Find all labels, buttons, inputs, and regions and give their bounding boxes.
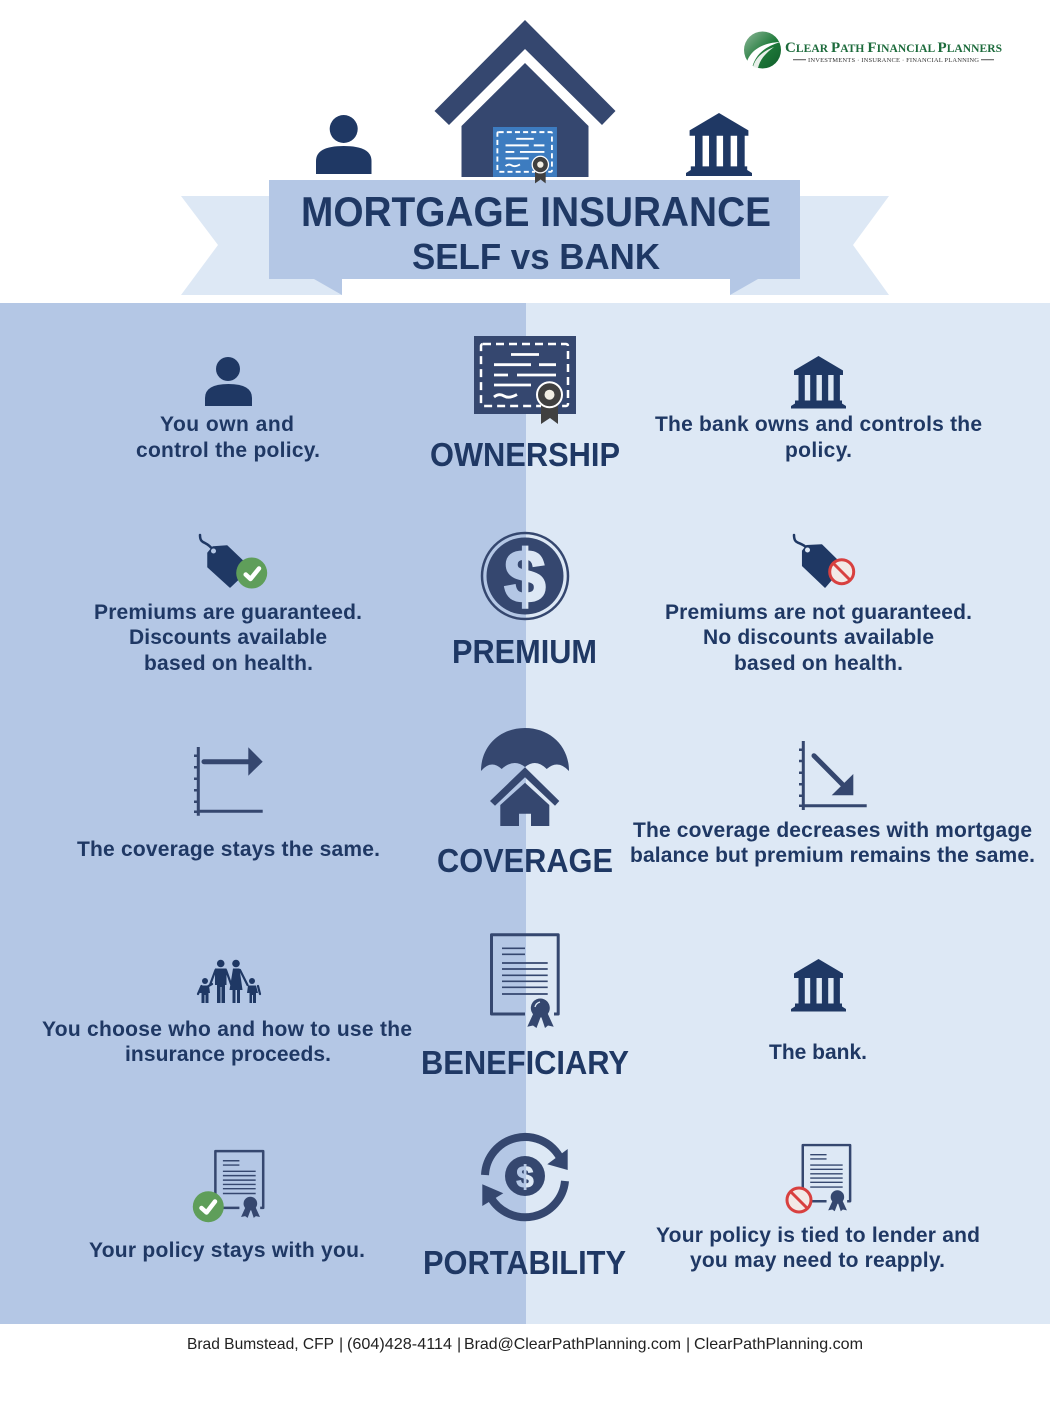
text: policy tied: you may need to reapply.	[690, 1249, 945, 1272]
icon: dollar coin	[482, 533, 568, 619]
text: you choose: You choose who and how to use the	[42, 1018, 412, 1041]
footer contact line: |	[686, 1336, 690, 1353]
row: premium, bank side	[665, 535, 972, 675]
row: premium, self side	[94, 535, 362, 675]
icon: policy document	[492, 935, 558, 1028]
footer contact line: |	[339, 1336, 343, 1353]
text: premiums guaranteed	[94, 601, 362, 675]
text: bank owns: The bank owns and controls the	[655, 413, 982, 436]
text: coverage decreases: The coverage decreases with mortgage	[633, 819, 1032, 842]
text: coverage same: The coverage stays the same.	[77, 838, 380, 861]
heading: premium: PREMIUM	[452, 633, 597, 670]
icon: bank	[791, 959, 846, 1012]
icon: bank	[791, 356, 846, 408]
text: coverage decreases	[630, 819, 1035, 867]
row: ownership, bank side	[655, 356, 982, 462]
text: premiums not guaranteed	[665, 601, 972, 675]
icon: circular arrows with dollar	[482, 1137, 568, 1217]
icon: person	[205, 357, 252, 406]
heading: beneficiary: BENEFICIARY	[421, 1044, 629, 1081]
text: premiums guaranteed: based on health.	[144, 652, 313, 675]
panel: bank (right column background)	[526, 303, 1050, 1324]
text: policy tied	[656, 1224, 980, 1272]
row: beneficiary, center heading and icon	[421, 935, 629, 1081]
row: ownership, center heading and icon	[430, 336, 620, 473]
icon: family	[198, 960, 260, 1003]
text: the bank: The bank.	[769, 1041, 867, 1064]
icon: policy document with check	[193, 1151, 263, 1222]
text: policy tied: Your policy is tied to lender and	[656, 1224, 980, 1247]
icon: bank (header)	[686, 113, 752, 176]
icon: policy document with prohibition	[787, 1145, 850, 1212]
text: policy stays: Your policy stays with you.	[89, 1239, 365, 1262]
text: you choose: insurance proceeds.	[125, 1043, 331, 1066]
text: bank owns	[655, 413, 982, 462]
text: premiums guaranteed: Premiums are guaranteed.	[94, 601, 362, 624]
text: premiums not guaranteed: No discounts available	[703, 626, 934, 649]
row: portability, self side	[89, 1151, 365, 1262]
footer contact line: Brad@ClearPathPlanning.com	[464, 1336, 681, 1353]
row: portability, center heading and icon	[423, 1137, 626, 1281]
icon: price tag with prohibition	[794, 535, 854, 587]
text: you own: control the policy.	[136, 439, 320, 462]
text: coverage decreases: balance but premium remains the same.	[630, 844, 1035, 867]
footer contact line: |	[457, 1336, 461, 1353]
icon: dollar coin: $	[504, 535, 546, 618]
footer contact line: ClearPathPlanning.com	[694, 1336, 863, 1353]
row: portability, bank side	[656, 1145, 980, 1272]
text: you choose	[42, 1018, 412, 1066]
logo: Clear Path Financial Planners: CLEAR PATH FINANCIAL PLANNERS	[785, 40, 1002, 56]
icon: umbrella over house	[481, 728, 569, 826]
row: coverage, self side	[77, 747, 380, 861]
footer contact line	[187, 1336, 863, 1353]
icon: circular arrows with dollar: $	[516, 1159, 534, 1194]
text: premiums not guaranteed: based on health.	[734, 652, 903, 675]
row: coverage, bank side	[630, 741, 1035, 867]
title ribbon	[181, 180, 889, 295]
icon: price tag with check	[200, 535, 267, 588]
text: premiums not guaranteed: Premiums are not guaranteed.	[665, 601, 972, 624]
row: ownership, self side	[136, 357, 320, 462]
panel: self (left column background)	[0, 303, 526, 1324]
footer contact line: (604)428-4114	[347, 1336, 452, 1353]
title: SELF vs BANK	[412, 236, 660, 277]
logo: Clear Path Financial Planners	[744, 32, 1002, 68]
text: you own: You own and	[160, 413, 294, 436]
text: premiums guaranteed: Discounts available	[129, 626, 327, 649]
icon: house with certificate (header)	[434, 20, 616, 183]
title	[301, 188, 771, 277]
chart: decreasing coverage	[799, 741, 867, 810]
chart: flat coverage	[194, 747, 263, 816]
heading: portability: PORTABILITY	[423, 1244, 626, 1281]
footer contact line: Brad Bumstead, CFP	[187, 1336, 334, 1353]
text: bank owns: policy.	[785, 439, 852, 462]
row: coverage, center heading and icon	[437, 728, 613, 879]
row: beneficiary, self side	[42, 960, 412, 1066]
row: beneficiary, bank side	[769, 959, 867, 1064]
logo: Clear Path Financial Planners: INVESTMENTS · INSURANCE · FINANCIAL PLANNING	[808, 57, 979, 64]
title: MORTGAGE INSURANCE	[301, 188, 771, 235]
text: you own	[136, 413, 320, 462]
icon: certificate	[474, 336, 576, 424]
row: premium, center heading and icon	[452, 533, 597, 670]
heading: ownership: OWNERSHIP	[430, 436, 620, 473]
icon: person (header)	[316, 115, 372, 174]
heading: coverage: COVERAGE	[437, 842, 613, 879]
